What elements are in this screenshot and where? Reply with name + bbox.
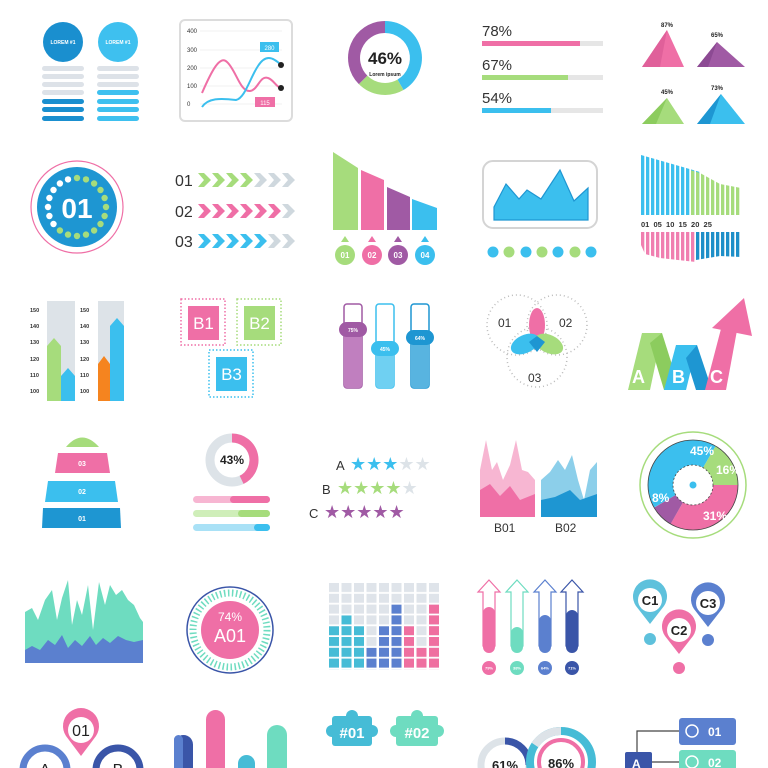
panel: slider tubes	[339, 304, 434, 388]
panel: two donuts	[481, 731, 592, 768]
panel: donut 46%	[354, 27, 416, 89]
panel: star ratings: ★★★★★	[350, 454, 431, 475]
panel: 01 A B pins	[23, 708, 140, 768]
panel: arrow bar columns: 100	[30, 389, 39, 395]
panel: step bars 01-04: 04	[421, 251, 430, 260]
panel: map pins C1 C2 C3: C2	[671, 623, 687, 638]
panel: arrow bar columns: 120	[80, 357, 89, 363]
panel: star ratings: ★★★★★	[337, 478, 418, 499]
panel: line chart: 300	[187, 48, 198, 54]
panel: chevron rows: 01	[175, 173, 193, 190]
panel: A01 dial	[187, 587, 273, 673]
panel: arrow bar columns: 130	[30, 340, 39, 346]
panel: segmented ring chart: 16%	[716, 463, 740, 477]
panel: puzzle pieces: #01	[339, 725, 365, 742]
panel: map pins C1 C2 C3	[633, 579, 725, 674]
panel: star ratings	[309, 454, 431, 523]
panel: segmented ring chart: 31%	[703, 509, 727, 523]
panel: arrow tubes: 71%	[568, 666, 576, 670]
panel: B1 B2 B3 boxes: B3	[221, 365, 242, 384]
panel: donut 43% with bars	[193, 438, 270, 531]
panel: slider tubes: 45%	[380, 347, 391, 353]
panel: arrow tubes: 38%	[513, 666, 521, 670]
panel: pyramid: 03	[78, 461, 86, 468]
panel: map pins C1 C2 C3: C1	[642, 593, 658, 608]
panel: lorem columns: LOREM #1	[105, 40, 131, 46]
panel: star ratings: ★★★★★	[324, 502, 405, 523]
panel: triangles: 65%	[711, 33, 724, 39]
panel: arrow bar columns: 110	[80, 373, 89, 379]
panel: arrow tubes: 64%	[541, 666, 549, 670]
panel: arrow tubes	[478, 580, 583, 675]
panel: lorem columns	[42, 22, 139, 121]
panel: triangles	[642, 23, 745, 124]
panel: striped bar chart: 01 05 10 15 20 25	[641, 220, 712, 229]
panel: star ratings: A	[336, 458, 345, 473]
panel: step bars 01-04: 03	[394, 251, 403, 260]
panel: donut 43% with bars: 43%	[220, 453, 244, 467]
panel: venn: 01	[498, 316, 512, 330]
panel: checklist tree	[625, 718, 736, 768]
panel: puzzle pieces: #02	[404, 725, 430, 742]
panel: line chart: 0	[187, 102, 191, 108]
panel: segmented ring chart: 45%	[690, 444, 714, 458]
panel: arrow bar columns: 130	[80, 340, 89, 346]
panel: square grid chart	[329, 583, 442, 669]
panel: arrow bar columns	[30, 301, 124, 401]
panel: ABC arrow: A	[632, 367, 645, 387]
panel: B1 B2 B3 boxes: B2	[249, 314, 270, 333]
panel: pyramid: 01	[78, 516, 86, 523]
panel: 01 badge: 01	[61, 193, 93, 224]
panel: triangles: 73%	[711, 86, 724, 92]
panel: chevron rows: 03	[175, 234, 193, 251]
panel: arrow bar columns: 120	[30, 357, 39, 363]
panel: step bars 01-04	[333, 152, 437, 265]
panel: line chart: 200	[187, 66, 198, 72]
panel: venn: 02	[559, 316, 573, 330]
panel: ABC arrow: C	[710, 367, 723, 387]
panel: B1 B2 B3 boxes	[181, 299, 281, 397]
panel: arrow bar columns: 140	[30, 324, 39, 330]
panel: pyramid: 02	[78, 489, 86, 496]
panel: ABC arrow: B	[672, 367, 685, 387]
panel: framed area chart	[483, 161, 597, 258]
panel: 01 A B pins: 01	[72, 723, 90, 740]
panel: step bars 01-04: 01	[341, 251, 350, 260]
panel: 01 badge	[31, 161, 123, 253]
panel: venn	[487, 295, 587, 387]
panel: triangles: 87%	[661, 23, 674, 29]
panel: lorem columns: LOREM #1	[50, 40, 76, 46]
panel: step bars 01-04: 02	[368, 251, 377, 260]
panel: slider tubes: 75%	[348, 328, 359, 334]
panel: progress bars	[482, 23, 603, 113]
panel: line chart: 100	[187, 84, 198, 90]
panel: donut 46%: 46%	[368, 49, 402, 68]
panel: slider tubes: 64%	[415, 336, 426, 342]
panel: line chart: 115	[260, 101, 270, 107]
panel: arrow bar columns: 100	[80, 389, 89, 395]
panel: checklist tree: 01	[708, 725, 722, 739]
panel: progress bars: 54%	[482, 90, 512, 107]
panel: rounded bars	[174, 710, 287, 768]
panel: segmented ring chart	[640, 432, 746, 538]
panel: venn: 03	[528, 371, 542, 385]
panel: B01 B02 area charts: B02	[555, 521, 577, 535]
panel: progress bars: 78%	[482, 23, 512, 40]
panel: B01 B02 area charts: B01	[494, 521, 516, 535]
panel: star ratings: C	[309, 506, 318, 521]
panel: A01 dial: 74%	[218, 610, 242, 624]
panel: ABC arrow	[628, 298, 752, 390]
panel: striped bar chart	[641, 155, 741, 262]
panel: arrow tubes: 79%	[485, 666, 493, 670]
panel: pyramid	[42, 438, 121, 528]
panel: puzzle pieces	[326, 710, 444, 746]
panel: triangles: 45%	[661, 90, 674, 96]
panel: progress bars: 67%	[482, 57, 512, 74]
panel: arrow bar columns: 110	[30, 373, 39, 379]
panel: line chart: 280	[264, 46, 275, 52]
panel: A01 dial: A01	[214, 626, 246, 646]
panel: segmented ring chart: 8%	[652, 491, 670, 505]
panel: chevron rows: 02	[175, 204, 193, 221]
panel: B01 B02 area charts	[480, 440, 597, 535]
panel: mountain area chart	[25, 580, 143, 663]
panel: arrow bar columns: 150	[80, 308, 89, 314]
panel: line chart: 400	[187, 29, 198, 35]
panel: star ratings: B	[322, 482, 331, 497]
panel: arrow bar columns: 140	[80, 324, 89, 330]
panel: line chart	[180, 20, 292, 121]
panel: B1 B2 B3 boxes: B1	[193, 314, 214, 333]
panel: arrow bar columns: 150	[30, 308, 39, 314]
panel: map pins C1 C2 C3: C3	[700, 596, 716, 611]
panel: donut 46%: Lorem ipsum	[369, 72, 401, 78]
panel: chevron rows	[175, 173, 295, 251]
